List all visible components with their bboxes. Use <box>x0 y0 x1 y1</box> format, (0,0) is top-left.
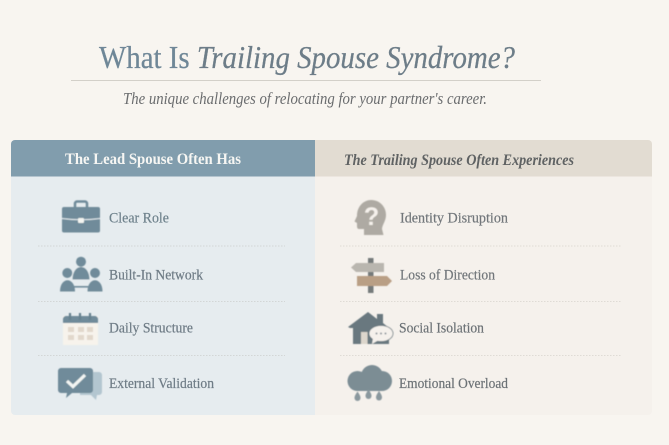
item: daily structure: Daily Structure <box>109 320 193 336</box>
icon: briefcase <box>62 202 100 232</box>
icon: rain cloud <box>348 365 392 401</box>
item: social isolation <box>348 312 485 344</box>
comparison panel <box>11 140 652 415</box>
header: trailing spouse <box>315 140 652 176</box>
left column items <box>58 202 215 400</box>
icon: signpost <box>351 258 392 293</box>
item: emotional overload <box>348 365 509 401</box>
icon: head with question mark: ? <box>364 203 379 231</box>
icon: calendar <box>63 313 98 345</box>
item: clear role: Clear Role <box>109 210 169 226</box>
icon: head with question mark <box>354 200 386 235</box>
icon: check speech bubbles <box>58 368 102 400</box>
subtitle: The unique challenges of relocating for your partner's career. <box>123 89 487 108</box>
item: loss of direction: Loss of Direction <box>400 268 496 284</box>
header: lead spouse: The Lead Spouse Often Has <box>65 151 241 168</box>
icon: people network <box>60 257 102 292</box>
item: emotional overload: Emotional Overload <box>399 376 509 392</box>
item: external validation <box>58 368 215 400</box>
title: What Is Trailing Spouse Syndrome? <box>99 39 515 75</box>
item: loss of direction <box>351 258 496 293</box>
item: social isolation: Social Isolation <box>399 320 485 336</box>
icon: house with speech bubble <box>348 312 393 344</box>
item: external validation: External Validation <box>109 376 215 392</box>
header: trailing spouse: The Trailing Spouse Often Experiences <box>344 152 574 169</box>
item: identity disruption <box>354 200 509 235</box>
header: lead spouse <box>11 140 315 176</box>
item: built-in network: Built-In Network <box>109 268 204 284</box>
item: built-in network <box>60 257 204 292</box>
item: daily structure <box>63 313 193 345</box>
right column items <box>348 200 509 401</box>
item: clear role <box>62 202 169 232</box>
item: identity disruption: Identity Disruption <box>400 210 509 226</box>
